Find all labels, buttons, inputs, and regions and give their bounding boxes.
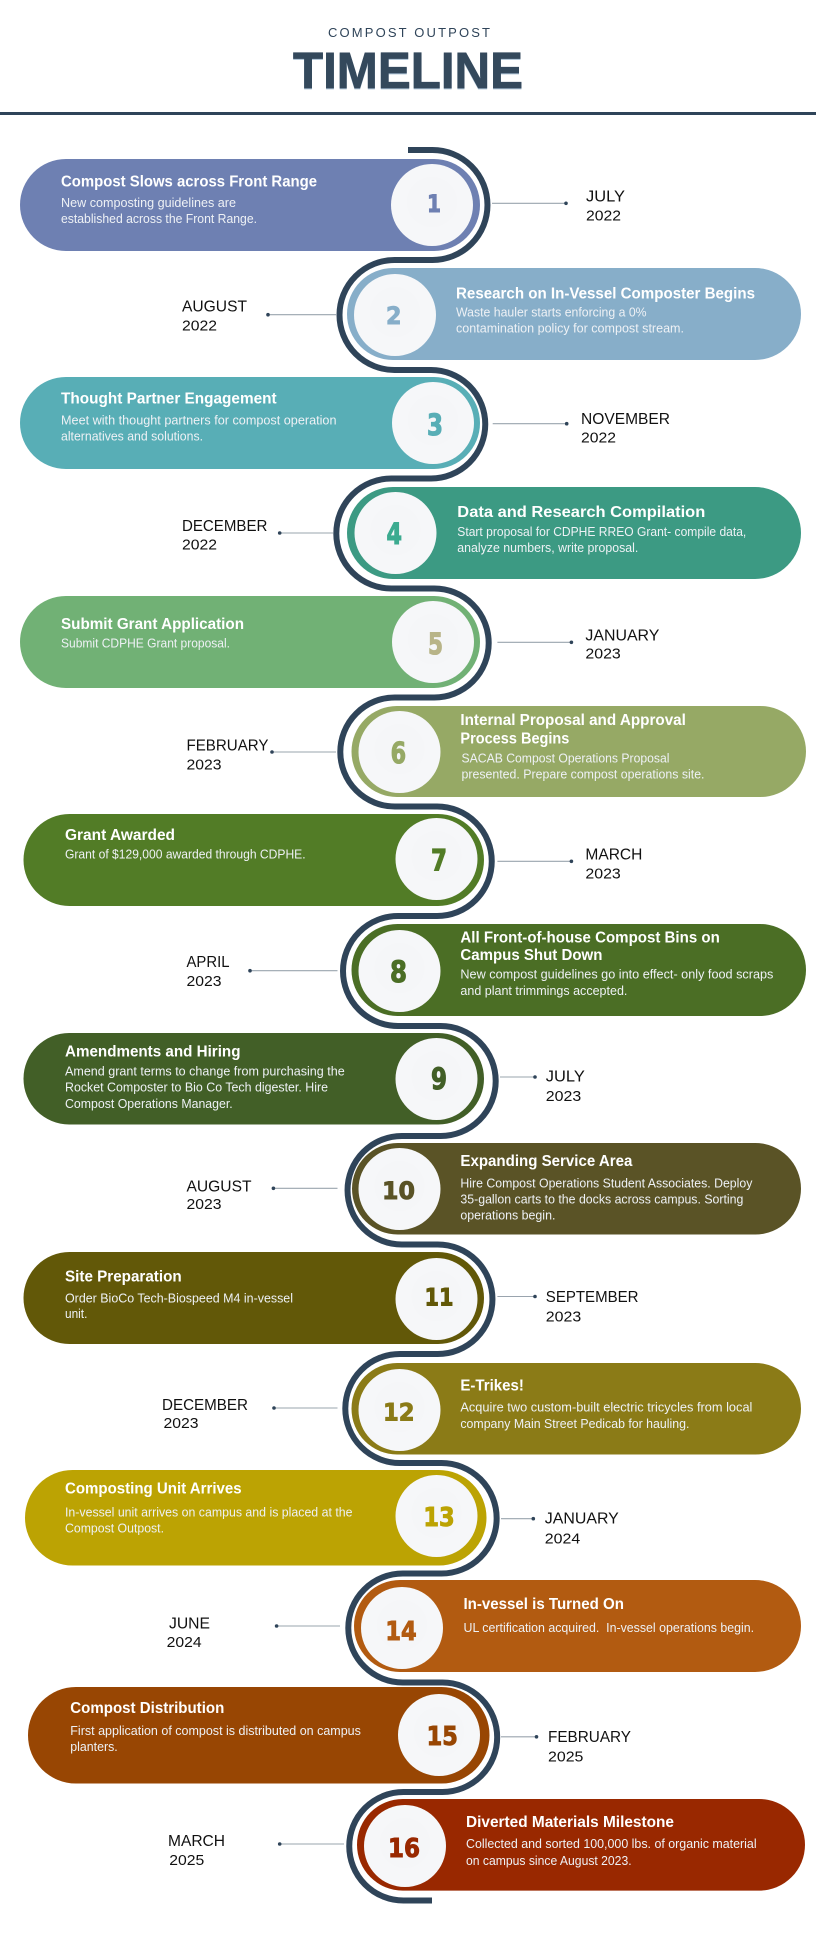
date: February 2025: FEBRUARY xyxy=(548,1729,631,1746)
panel: step 8: All Front-of-house Compost Bins on xyxy=(460,929,720,946)
panel: step 10: operations begin. xyxy=(460,1209,555,1223)
date: August 2023 xyxy=(186,1178,338,1213)
date: March 2023: MARCH xyxy=(585,846,642,863)
panel: step 4: Data and Research Compilation xyxy=(457,504,705,521)
date: August 2023: 2023 xyxy=(186,1197,222,1213)
panel: step 15 xyxy=(28,1687,490,1784)
subtitle: COMPOST OUTPOST xyxy=(328,25,490,40)
date: September 2023: SEPTEMBER xyxy=(546,1289,638,1306)
panel: step 3: alternatives and solutions. xyxy=(61,429,203,443)
panel: step 14: In-vessel is Turned On xyxy=(464,1596,624,1613)
date: April 2023: APRIL xyxy=(186,954,230,971)
panel: step 16: 16 xyxy=(388,1834,420,1864)
panel: step 8: 8 xyxy=(390,955,407,989)
panel: step 5: 5 xyxy=(428,627,443,661)
date: February 2023: 2023 xyxy=(186,757,222,773)
panel: step 6: 6 xyxy=(391,736,406,770)
date: June 2024 xyxy=(167,1615,340,1651)
date: July 2022: 2022 xyxy=(586,209,621,225)
panel: step 15: First application of compost is distributed on campus xyxy=(70,1724,361,1738)
panel: step 8 xyxy=(352,924,806,1016)
panel: step 5 xyxy=(20,596,480,688)
panel: step 13 xyxy=(25,1470,486,1566)
date: July 2023: JULY xyxy=(546,1069,585,1086)
panel: step 3 xyxy=(20,377,480,469)
date: December 2022 xyxy=(182,518,333,553)
panel: step 11: Site Preparation xyxy=(65,1268,182,1285)
date: March 2025: 2025 xyxy=(169,1853,204,1869)
date: August 2023: AUGUST xyxy=(186,1178,252,1195)
panel: step 16 xyxy=(357,1799,805,1891)
panel: step 3: Thought Partner Engagement xyxy=(61,390,277,407)
date: July 2022 xyxy=(492,189,625,225)
panel: step 14 xyxy=(354,1580,801,1672)
panel: step 13: 13 xyxy=(423,1503,455,1533)
date: January 2024: 2024 xyxy=(545,1532,580,1548)
panel: step 9: 9 xyxy=(431,1062,447,1096)
panel: step 13: Composting Unit Arrives xyxy=(65,1480,242,1497)
panel: step 4: Start proposal for CDPHE RREO Grant- compile data, xyxy=(457,525,746,539)
date: February 2023 xyxy=(186,737,336,773)
date: January 2024: JANUARY xyxy=(545,1511,619,1528)
date: March 2025 xyxy=(168,1833,344,1869)
panel: step 1 xyxy=(20,159,480,251)
panel: step 2: Research on In-Vessel Composter Begins xyxy=(456,285,755,302)
date: April 2023 xyxy=(186,954,338,990)
date: March 2023: 2023 xyxy=(585,866,621,882)
panel: step 3: Meet with thought partners for compost operation xyxy=(61,413,337,427)
header xyxy=(0,25,816,115)
panel: step 10: 10 xyxy=(382,1177,415,1205)
panel: step 6 xyxy=(352,706,806,797)
panel: step 13: In-vessel unit arrives on campus and is placed at the xyxy=(65,1505,353,1519)
header rule xyxy=(0,112,816,115)
date: July 2023 xyxy=(500,1069,585,1105)
panel: step 10: 35-gallon carts to the docks across campus. Sorting xyxy=(460,1192,743,1206)
panel: step 2: contamination policy for compost stream. xyxy=(456,322,684,336)
panel: step 6: presented. Prepare compost operations site. xyxy=(462,768,704,782)
date: August 2022 xyxy=(182,299,336,335)
panel: step 4: analyze numbers, write proposal. xyxy=(457,541,638,555)
panel: step 2 xyxy=(347,268,801,360)
panel: step 7: Grant Awarded xyxy=(65,827,175,844)
panel: step 1: Compost Slows across Front Range xyxy=(61,174,317,191)
title: TIMELINE xyxy=(293,42,523,99)
panel: step 12: Acquire two custom-built electric tricycles from local xyxy=(460,1401,752,1415)
panel: step 6: SACAB Compost Operations Proposal xyxy=(462,752,670,766)
panel: step 9: Rocket Composter to Bio Co Tech digester. Hire xyxy=(65,1081,328,1095)
panel: step 8: Campus Shut Down xyxy=(460,947,602,964)
date: March 2023 xyxy=(497,846,642,882)
date: December 2022: 2022 xyxy=(182,537,217,553)
timeline spine xyxy=(336,150,497,1900)
date: February 2025 xyxy=(501,1729,631,1766)
date: January 2023: JANUARY xyxy=(585,627,659,644)
panel: step 11: unit. xyxy=(65,1307,87,1321)
panel: step 15: planters. xyxy=(70,1740,118,1754)
panel: step 7: Grant of $129,000 awarded through CDPHE. xyxy=(65,848,306,862)
panel: step 15: 15 xyxy=(427,1722,458,1752)
panel: step 3: 3 xyxy=(427,408,443,442)
date: June 2024: 2024 xyxy=(167,1635,202,1651)
panel: step 15: Compost Distribution xyxy=(70,1700,224,1717)
panel: step 7: 7 xyxy=(431,844,447,878)
panel: step 9 xyxy=(24,1033,484,1124)
date: February 2025: 2025 xyxy=(548,1750,583,1766)
panel: step 9: Amendments and Hiring xyxy=(65,1043,240,1060)
panel: step 13: Compost Outpost. xyxy=(65,1522,164,1536)
panel: step 12 xyxy=(352,1363,801,1454)
panel: step 1: established across the Front Range. xyxy=(61,212,257,226)
panel: step 12: 12 xyxy=(383,1398,415,1426)
date: March 2025: MARCH xyxy=(168,1833,225,1850)
date: January 2024 xyxy=(501,1511,619,1548)
panel: step 14: 14 xyxy=(385,1617,417,1647)
panel: step 8: and plant trimmings accepted. xyxy=(460,984,627,998)
panel: step 6: Internal Proposal and Approval xyxy=(460,712,686,729)
date: September 2023: 2023 xyxy=(546,1309,581,1325)
panel: step 12: E-Trikes! xyxy=(460,1378,524,1395)
panel: step 5: Submit CDPHE Grant proposal. xyxy=(61,636,230,650)
date: January 2023: 2023 xyxy=(585,647,621,663)
date: July 2023: 2023 xyxy=(546,1089,581,1105)
date: February 2023: FEBRUARY xyxy=(186,737,268,754)
date: August 2022: 2022 xyxy=(182,319,217,335)
date: July 2022: JULY xyxy=(586,189,625,206)
panel: step 12: company Main Street Pedicab for hauling. xyxy=(460,1417,689,1431)
date: November 2022 xyxy=(493,411,670,446)
date: December 2023: DECEMBER xyxy=(162,1397,248,1414)
panel: step 4 xyxy=(347,487,801,579)
panel: step 14: UL certification acquired. In-vessel operations begin. xyxy=(464,1621,754,1635)
panel: step 16: on campus since August 2023. xyxy=(466,1854,632,1868)
panel: step 10: Expanding Service Area xyxy=(460,1153,633,1170)
date: April 2023: 2023 xyxy=(186,974,222,990)
date: June 2024: JUNE xyxy=(169,1615,210,1632)
panel: step 16: Collected and sorted 100,000 lbs. of organic material xyxy=(466,1837,757,1851)
date: November 2022: NOVEMBER xyxy=(581,411,670,428)
panel: step 4: 4 xyxy=(386,517,402,551)
panel: step 6: Process Begins xyxy=(460,730,569,747)
panel: step 9: Compost Operations Manager. xyxy=(65,1097,233,1111)
panel: step 16: Diverted Materials Milestone xyxy=(466,1814,674,1831)
date: August 2022: AUGUST xyxy=(182,299,248,316)
panel: step 10 xyxy=(352,1143,801,1234)
panel: step 7 xyxy=(24,814,484,906)
date: November 2022: 2022 xyxy=(581,430,616,446)
date: December 2023: 2023 xyxy=(164,1416,198,1432)
panel: step 1: New composting guidelines are xyxy=(61,196,236,210)
panel: step 11 xyxy=(24,1252,484,1344)
panel: step 10: Hire Compost Operations Student Associates. Deploy xyxy=(460,1176,753,1190)
panel: step 1: 1 xyxy=(427,190,441,218)
date: December 2022: DECEMBER xyxy=(182,518,267,535)
panel: step 5: Submit Grant Application xyxy=(61,616,244,633)
panel: step 2: 2 xyxy=(386,302,402,330)
date: September 2023 xyxy=(497,1289,638,1325)
panel: step 2: Waste hauler starts enforcing a 0% xyxy=(456,306,647,320)
panel: step 11: Order BioCo Tech-Biospeed M4 in-vessel xyxy=(65,1291,293,1305)
panel: step 11: 11 xyxy=(424,1284,454,1312)
date: January 2023 xyxy=(497,627,659,663)
panel: step 9: Amend grant terms to change from purchasing the xyxy=(65,1064,345,1078)
panel: step 8: New compost guidelines go into effect- only food scraps xyxy=(460,968,773,982)
date: December 2023 xyxy=(162,1397,338,1432)
